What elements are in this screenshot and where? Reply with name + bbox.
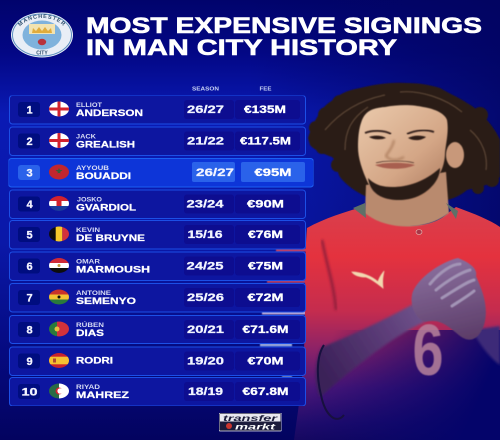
transfermarkt logo: markt [235,422,276,432]
icon: Manchester City crest [11,12,73,58]
transfermarkt logo: transfer [223,414,279,423]
row 5: 15/16 [188,229,222,241]
row 8: 8 [26,324,33,336]
row 1 [10,96,306,124]
row 10: MAHREZ [76,390,129,401]
shirt [294,207,500,440]
row 7: 25/26 [187,292,224,304]
collar [353,203,458,219]
column headers: FEE [260,86,272,92]
neck [365,172,449,227]
fingers [430,264,474,306]
row 4: 23/24 [186,198,225,210]
row 1: ANDERSON [76,108,143,119]
row 4: JOSKO [77,196,102,204]
row 7: €72M [248,292,284,304]
row 6: 24/25 [186,260,224,272]
title: IN MAN CITY HISTORY [86,35,397,60]
row 9: €70M [248,356,284,368]
row 3 highlighted: BOUADDI [76,171,131,182]
transfermarkt logo [219,413,282,432]
row 6: €75M [248,260,283,272]
row 7: 7 [26,292,33,304]
mouth [375,163,415,169]
row 7 [10,284,306,312]
row 2: €117.5M [240,136,291,148]
row 5 [10,220,306,249]
row 3 highlighted [8,158,314,187]
row 10: €67.8M [242,386,288,398]
eyebrows [365,130,434,134]
row 1: 26/27 [187,104,224,116]
row 5: 5 [26,230,33,242]
shirt button [416,230,422,234]
row 9: 19/20 [187,356,224,368]
row 9: 9 [26,356,33,368]
column headers: SEASON [192,86,219,92]
moustache [376,161,414,163]
beard [368,168,440,200]
row 1: ELLIOT [76,102,102,109]
row 5: KEVIN [76,227,101,234]
hair [308,83,500,200]
row 10: 10 [22,386,38,398]
arm [316,304,425,397]
shirt fade [294,330,500,440]
title [86,13,482,60]
row 5: €76M [248,229,283,241]
ranking table [8,96,314,406]
row 8: 20/21 [187,324,224,336]
hair strands [325,92,486,170]
icon: Manchester City crest: MANCHESTER [18,14,66,26]
player photo [260,83,500,440]
shirt number 6: 6 [412,311,444,391]
icon: Manchester City crest: CITY [36,50,48,56]
row 7: ANTOINE [76,290,111,297]
row 4: 4 [26,199,33,211]
row 3 highlighted: €95M [254,167,292,179]
sleeve seam [322,240,336,310]
row 3 highlighted: 26/27 [196,167,234,179]
row 10: RIYAD [76,384,101,391]
second forearm [472,326,500,365]
puma logo [352,271,384,288]
eyes [369,136,426,140]
row 10: 18/19 [188,386,223,398]
wristband [318,345,344,419]
row 6: OMAR [76,258,101,266]
row 6: 6 [26,261,33,273]
hands [412,258,486,340]
shirt sleeve showing between rows [260,248,308,377]
row 8: RÚBEN [76,322,105,329]
row 1: 1 [26,104,33,116]
row 5: DE BRUYNE [76,233,146,244]
row 8 [10,316,306,344]
row 3 highlighted: 3 [26,168,33,180]
row 9 [10,347,306,376]
row 8: €71.6M [242,324,288,336]
row 4: GVARDIOL [76,202,136,214]
row 9: RODRI [76,356,113,366]
row 7: SEMENYO [76,296,137,307]
row 10 [10,378,306,406]
row 2 [10,127,306,156]
nose [386,140,404,160]
row 3 highlighted: AYYOUB [76,165,110,172]
row 8: DIAS [76,328,105,339]
row 2: GREALISH [76,140,135,150]
row 2: 2 [26,136,33,148]
row 2: JACK [76,134,97,140]
row 6: MARMOUSH [76,264,150,276]
face [358,105,448,200]
row 4 [10,190,306,218]
row 6 [10,252,306,280]
row 2: 21/22 [187,136,224,148]
row 4: €90M [247,198,284,210]
ear [446,142,464,168]
title: MOST EXPENSIVE SIGNINGS [86,13,482,38]
column headers [192,86,272,92]
row 1: €135M [244,104,286,116]
